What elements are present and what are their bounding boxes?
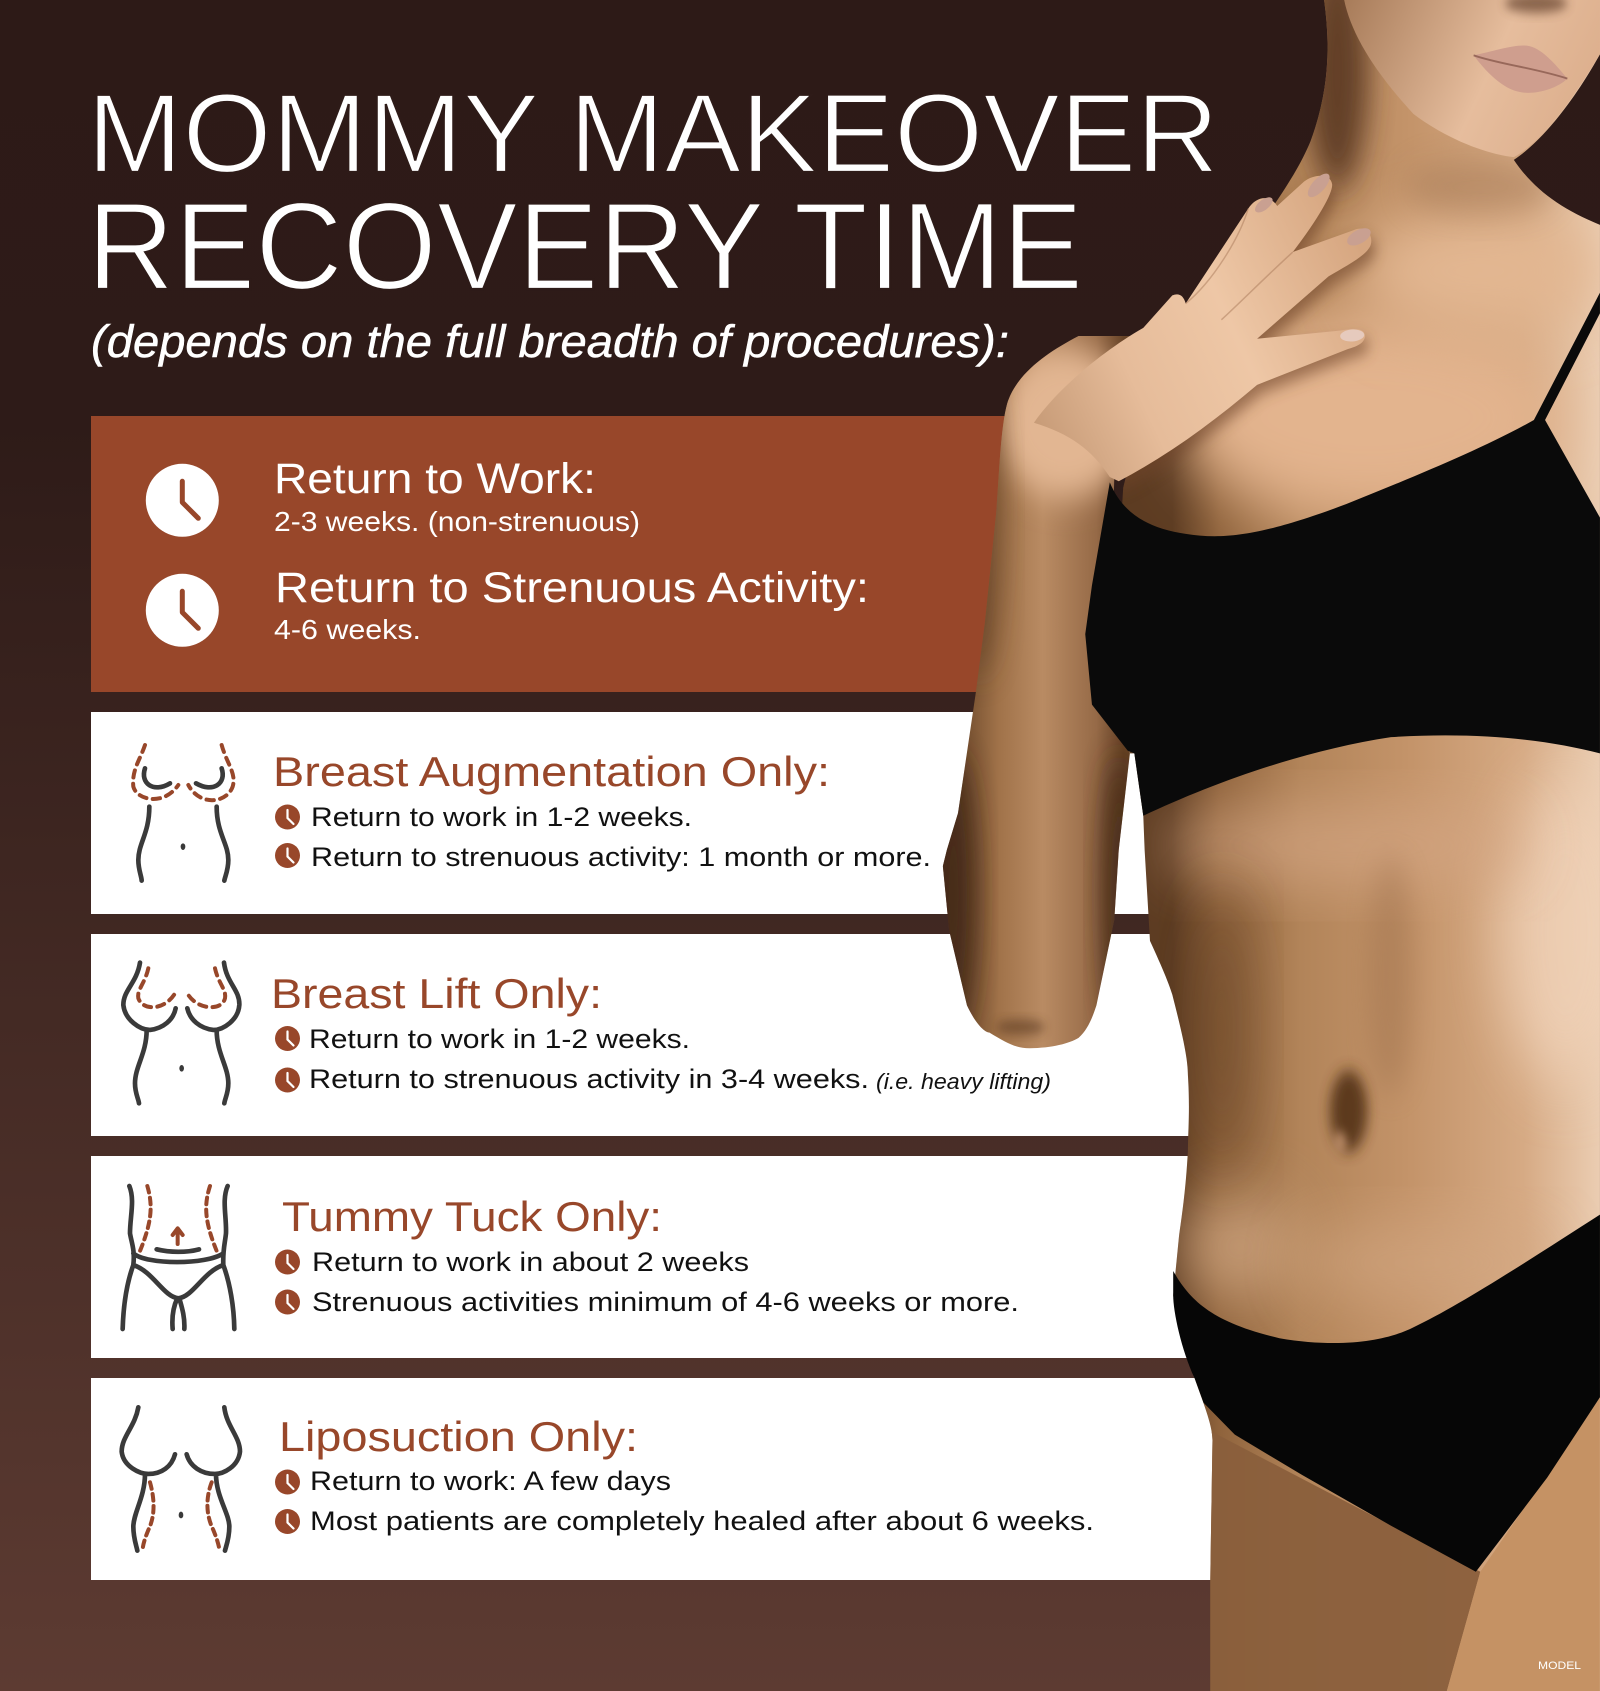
underwear xyxy=(1173,1215,1600,1572)
text: return to work: 2-3 weeks. (non-strenuous) xyxy=(274,506,640,537)
heading: Breast Augmentation Only: xyxy=(273,748,830,795)
title: MOMMY MAKEOVER xyxy=(87,71,1219,196)
icon: bullet clock xyxy=(275,1026,300,1051)
icon: fingernails xyxy=(1253,170,1373,342)
icon: clock strenuous xyxy=(146,574,219,647)
text: work: Return to work in 1-2 weeks. xyxy=(311,802,692,832)
torso and neck xyxy=(1114,0,1600,1691)
text: return to work: Return to Work: xyxy=(274,455,596,503)
title xyxy=(87,71,1219,316)
text: return to strenuous activity: 4-6 weeks. xyxy=(274,614,421,645)
title: RECOVERY TIME xyxy=(87,178,1083,316)
face: chin and lips xyxy=(1344,0,1600,157)
text: work: Return to work in about 2 weeks xyxy=(312,1247,749,1277)
icon: bullet clock xyxy=(275,1250,300,1274)
icon: clock work xyxy=(146,464,219,537)
text: return to strenuous activity: Return to Strenuous Activity: xyxy=(275,564,869,612)
panel: breast lift xyxy=(91,934,1491,1136)
icon: bullet clock xyxy=(275,1509,300,1534)
icon: breast augmentation diagram xyxy=(133,745,234,881)
text: strenuous: Return to strenuous activity in 3-4 weeks. xyxy=(309,1064,869,1094)
icon: bullet clock xyxy=(275,1290,300,1314)
panel: overall return times xyxy=(91,416,1091,692)
panel: breast augmentation xyxy=(91,712,1491,914)
hand xyxy=(1034,170,1373,481)
text: work: Return to work: A few days xyxy=(310,1466,671,1496)
icon: bullet clock xyxy=(275,1068,300,1092)
text: healing: Most patients are completely healed after about 6 weeks. xyxy=(310,1506,1094,1536)
heading: Liposuction Only: xyxy=(279,1413,638,1460)
illustration: model figure xyxy=(931,0,1600,1691)
heading: Breast Lift Only: xyxy=(271,970,602,1017)
icon: tummy tuck diagram xyxy=(123,1186,234,1329)
text: strenuous xyxy=(309,1064,1051,1094)
arm xyxy=(942,336,1130,1048)
subtitle: (depends on the full breadth of procedures): xyxy=(91,316,1009,367)
icon: breast lift diagram xyxy=(123,963,239,1103)
text: return to strenuous activity xyxy=(274,564,869,645)
text: strenuous: Strenuous activities minimum of 4-6 weeks or more. xyxy=(312,1287,1019,1317)
text: return to work xyxy=(274,455,640,537)
heading: Tummy Tuck Only: xyxy=(282,1193,662,1240)
bra xyxy=(1085,293,1600,816)
icon: bullet clock xyxy=(275,843,300,868)
icon: bullet clock xyxy=(275,804,300,830)
panel: tummy tuck xyxy=(91,1156,1491,1358)
text: work: Return to work in 1-2 weeks. xyxy=(309,1024,690,1054)
text: strenuous: Return to strenuous activity: 1 month or more. xyxy=(311,842,931,872)
model caption: MODEL xyxy=(1538,1660,1581,1672)
icon: bullet clock xyxy=(275,1470,300,1494)
icon: liposuction diagram xyxy=(122,1407,240,1551)
panel: liposuction xyxy=(91,1378,1491,1580)
text: strenuous: (i.e. heavy lifting) xyxy=(876,1069,1051,1094)
